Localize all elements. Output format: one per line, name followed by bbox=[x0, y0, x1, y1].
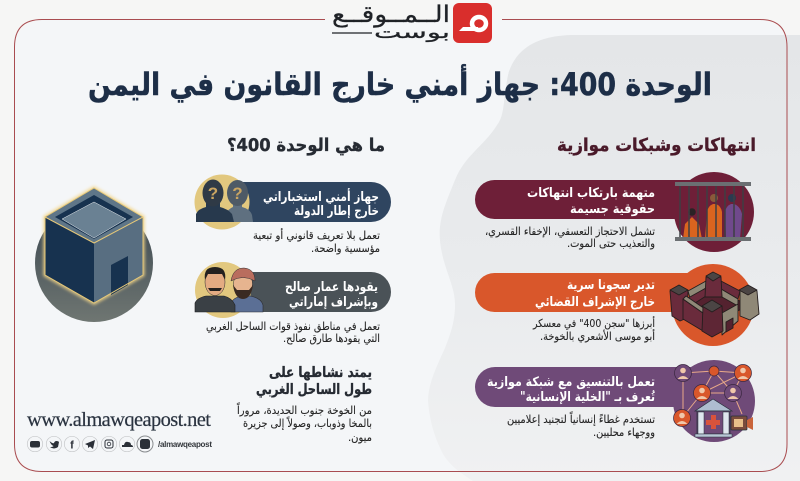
logo wordmark bbox=[332, 2, 450, 43]
icon: youtube bbox=[27, 436, 43, 452]
card heading: حقوقية جسيمة bbox=[570, 202, 655, 217]
card description: ووجهاء محليين. bbox=[593, 426, 655, 439]
icon: facebook bbox=[64, 436, 80, 452]
section description: ميون. bbox=[348, 431, 372, 444]
card description: تشمل الاحتجاز التعسفي، الإخفاء القسري، bbox=[485, 225, 655, 238]
social handle: /almawqeapost bbox=[158, 440, 212, 449]
panel: accused of violations bbox=[475, 172, 754, 252]
icon: anonymous figures bbox=[196, 180, 253, 222]
card heading: وبإشراف إماراتي bbox=[289, 295, 378, 310]
icon: instagram bbox=[101, 436, 117, 452]
section description bbox=[237, 402, 372, 444]
heading: violations and parallel networks: انتهاكات وشبكات موازية bbox=[557, 135, 756, 156]
panel: intelligence apparatus bbox=[194, 174, 391, 255]
panel: western coast bbox=[237, 365, 372, 444]
icon: facebook: f bbox=[70, 440, 74, 452]
section description: من الخوخة جنوب الحديدة، مروراً bbox=[237, 402, 372, 417]
logo wordmark: بوست bbox=[374, 23, 450, 43]
card heading: متهمة بارتكاب انتهاكات bbox=[527, 186, 655, 201]
title: الوحدة 400: جهاز أمني خارج القانون في اليمن bbox=[88, 64, 712, 103]
icon: fortress bbox=[670, 272, 759, 337]
logo mark bbox=[453, 3, 492, 43]
icon: soundcloud bbox=[119, 436, 135, 452]
section description: بالمخا وذوباب، وصولاً إلى جزيرة bbox=[243, 415, 372, 430]
card heading: خارج إطار الدولة bbox=[294, 204, 379, 219]
card heading bbox=[535, 278, 655, 310]
card heading bbox=[487, 375, 655, 405]
panel: leadership bbox=[195, 262, 391, 345]
icon: twitter bbox=[46, 436, 62, 452]
card heading: خارج الإشراف القضائي bbox=[535, 295, 655, 310]
card description: أبرزها "سجن 400" في معسكر bbox=[532, 316, 655, 330]
card description: مؤسسية واضحة. bbox=[311, 242, 380, 255]
card description: التي يقودها طارق صالح. bbox=[283, 332, 380, 345]
card heading bbox=[285, 280, 378, 310]
section heading: يمتد نشاطها على bbox=[269, 365, 372, 381]
card description: أبو موسى الأشعري بالخوخة. bbox=[540, 329, 655, 343]
card heading bbox=[263, 188, 379, 219]
card description bbox=[532, 316, 655, 343]
card heading: تُعرف بـ "الخلية الإنسانية" bbox=[520, 390, 655, 405]
card heading: يقودها عمار صالح bbox=[285, 280, 378, 295]
section heading: طول الساحل الغربي bbox=[256, 382, 372, 398]
heading: what is Unit 400: ما هي الوحدة 400؟ bbox=[227, 135, 385, 156]
website url: www.almawqeapost.net bbox=[27, 409, 211, 431]
icon: urgent channel bbox=[137, 436, 153, 452]
card heading bbox=[527, 186, 655, 217]
icon: anonymous figures: ? bbox=[232, 184, 243, 203]
icon: network with humanitarian building bbox=[674, 364, 753, 437]
card description bbox=[507, 411, 655, 439]
card description: والتعذيب حتى الموت. bbox=[567, 237, 655, 250]
card description: تعمل في مناطق نفوذ قوات الساحل الغربي bbox=[206, 320, 380, 334]
logo bbox=[332, 2, 492, 43]
icon: prison cell bbox=[675, 182, 751, 241]
panel: parallel network bbox=[475, 360, 755, 442]
section heading bbox=[256, 365, 372, 398]
card heading: تعمل بالتنسيق مع شبكة موازية bbox=[487, 375, 655, 390]
card description: تستخدم غطاءً إنسانياً لتجنيد إعلاميين bbox=[507, 411, 655, 426]
card heading: جهاز أمني استخباراتي bbox=[263, 188, 379, 205]
social media row bbox=[27, 436, 212, 452]
icon: two men portraits bbox=[195, 267, 263, 312]
card description bbox=[485, 225, 655, 250]
card description bbox=[253, 228, 380, 255]
card description: تعمل بلا تعريف قانوني أو تبعية bbox=[253, 228, 380, 242]
card heading: تدير سجونا سرية bbox=[567, 278, 655, 293]
icon: unit 400 cube bbox=[35, 188, 153, 322]
card description bbox=[206, 320, 380, 345]
logo wordmark: الــمــوقــع bbox=[332, 2, 450, 28]
icon: anonymous figures: ? bbox=[208, 184, 218, 203]
icon: telegram bbox=[82, 436, 98, 452]
panel: secret prisons bbox=[475, 264, 759, 346]
